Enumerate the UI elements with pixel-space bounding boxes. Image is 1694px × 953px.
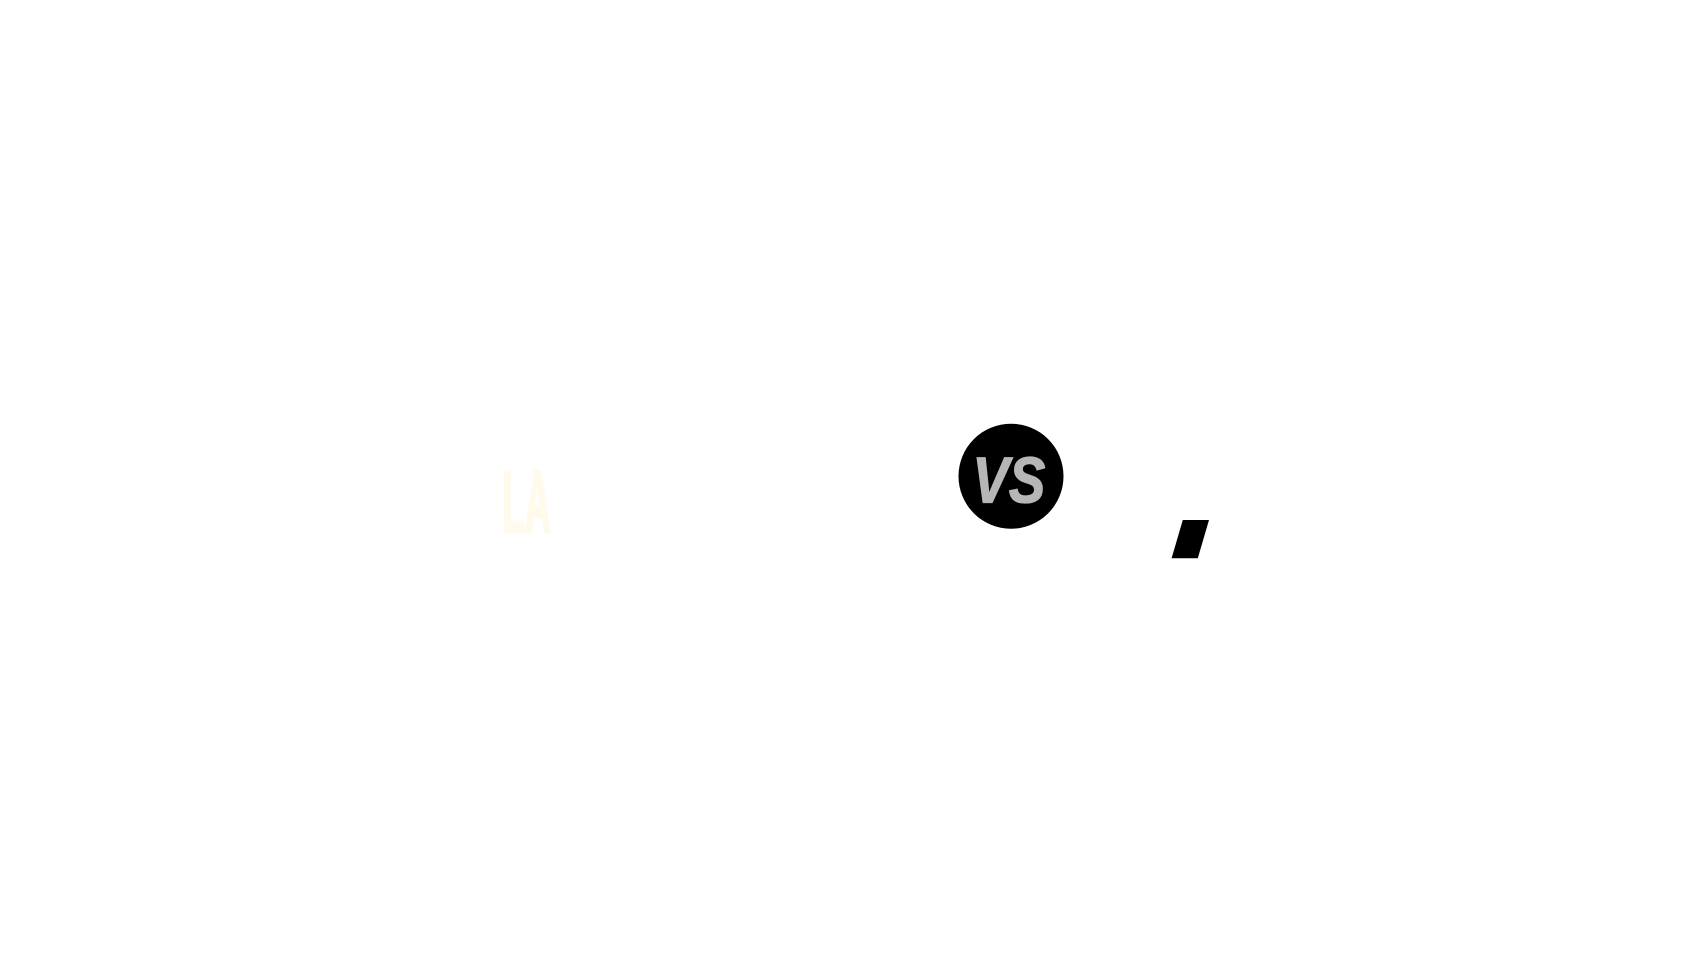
- icon: black parallelogram: [1172, 520, 1209, 558]
- badge: VS circle: [958, 424, 1064, 529]
- VS text: VS: [972, 444, 1045, 517]
- label: LA: LA: [502, 455, 551, 552]
